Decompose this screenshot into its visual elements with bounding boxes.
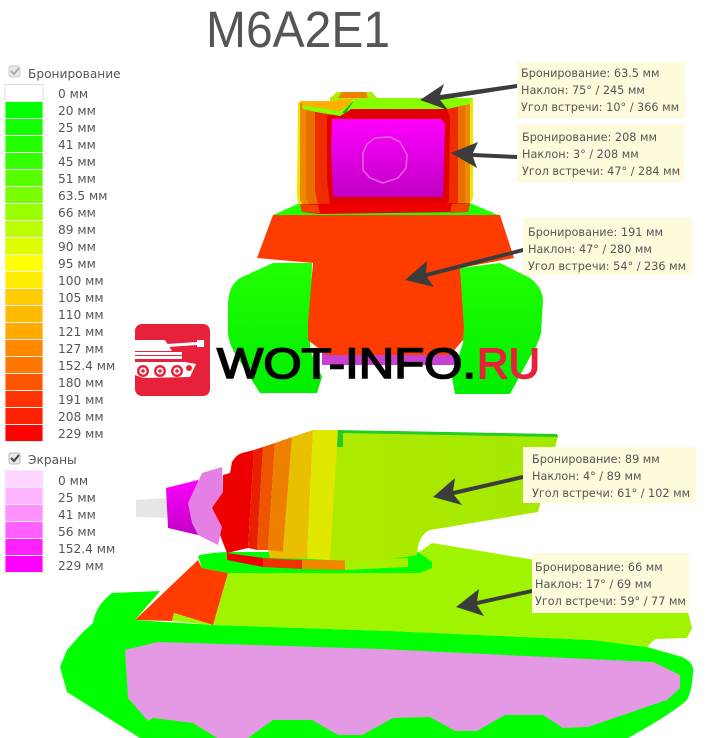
legend labels: armour: 51 мм	[58, 172, 96, 186]
callout: hull front: Угол встречи: 54° / 236 мм	[528, 260, 686, 273]
legend labels: armour: 191 мм	[58, 393, 104, 407]
callout: turret roof	[517, 62, 685, 118]
legend labels: armour: 127 мм	[58, 342, 104, 356]
arrow: turret roof	[420, 84, 517, 110]
watermark logo	[135, 324, 540, 396]
legend labels: armour: 180 мм	[58, 376, 104, 390]
callout: turret roof: Угол встречи: 10° / 366 мм	[521, 101, 679, 114]
legend labels: screens	[58, 474, 115, 573]
front view of tank	[228, 92, 543, 394]
legend heading: screens: Экраны	[28, 453, 77, 467]
callout: turret side: Угол встречи: 61° / 102 мм	[532, 487, 690, 500]
legend swatches: armour	[5, 84, 43, 442]
callout: hull front: Бронирование: 191 мм	[528, 226, 663, 239]
turret band: dark red	[248, 447, 263, 550]
turret body	[212, 430, 558, 560]
turret band: orange	[268, 437, 292, 552]
callout: hull front: Наклон: 47° / 280 мм	[528, 243, 652, 256]
turret top rim	[337, 430, 558, 447]
gun mantlet screen	[331, 119, 445, 197]
legend labels: screens: 41 мм	[58, 508, 96, 522]
turret collar	[300, 203, 470, 214]
legend heading: armour: Бронирование	[28, 67, 121, 81]
legend labels: armour: 105 мм	[58, 291, 104, 305]
track side panel	[125, 642, 680, 738]
checkbox: armour	[9, 66, 20, 77]
legend labels: armour: 100 мм	[58, 274, 104, 288]
legend labels: armour: 63.5 мм	[58, 189, 107, 203]
arrow: turret side	[433, 475, 523, 505]
callout: hull front	[523, 218, 692, 275]
legend labels: armour: 152.4 мм	[58, 359, 115, 373]
tracks: front right	[452, 263, 543, 394]
legend labels: armour: 95 мм	[58, 257, 96, 271]
legend labels: screens: 152.4 мм	[58, 542, 115, 556]
callout: turret roof: Бронирование: 63.5 мм	[521, 67, 660, 80]
legend labels: armour: 45 мм	[58, 155, 96, 169]
tracks: front left	[228, 263, 322, 393]
legend swatches: screens	[5, 470, 43, 572]
turret mantlet red	[212, 450, 254, 553]
turret ring	[198, 552, 432, 573]
callout: hull side: Бронирование: 66 мм	[535, 561, 663, 574]
lower hull strip	[322, 352, 455, 365]
arrow: hull side	[456, 589, 532, 616]
callout: turret side	[523, 447, 696, 503]
callout: hull side: Угол встречи: 59° / 77 мм	[535, 595, 686, 608]
callout: turret front: Угол встречи: 47° / 284 мм	[522, 165, 680, 178]
hull front armour	[257, 215, 514, 355]
turret ring segments	[227, 553, 408, 570]
callout: turret side: Бронирование: 89 мм	[532, 453, 660, 466]
legend labels: armour: 90 мм	[58, 240, 96, 254]
legend labels: screens: 56 мм	[58, 525, 96, 539]
arrow: hull front	[405, 248, 523, 287]
legend labels: armour: 121 мм	[58, 325, 104, 339]
logo icon: tank	[135, 324, 210, 396]
hull front plate	[135, 560, 228, 625]
callout: turret front: Наклон: 3° / 208 мм	[522, 148, 639, 161]
legend labels: armour: 0 мм	[58, 87, 88, 101]
left hatch	[300, 98, 355, 111]
arrow: turret front	[451, 142, 517, 168]
legend labels: armour: 208 мм	[58, 410, 104, 424]
callout: hull side	[532, 553, 689, 613]
legend labels: armour: 89 мм	[58, 223, 96, 237]
hull front lime wedge	[172, 613, 213, 625]
legend labels: armour: 20 мм	[58, 104, 96, 118]
callout: turret roof: Наклон: 75° / 245 мм	[521, 84, 645, 97]
legend labels: armour: 229 мм	[58, 427, 104, 441]
turret band: yellow	[307, 430, 338, 560]
cupola	[330, 92, 377, 101]
gun opening	[363, 137, 407, 183]
turret band: orange red	[257, 443, 275, 550]
legend labels: screens: 229 мм	[58, 559, 104, 573]
legend labels: armour: 25 мм	[58, 121, 96, 135]
hull top green	[273, 203, 498, 215]
logo text: domain: RU	[477, 340, 540, 388]
gun screen	[188, 467, 223, 545]
legend labels: armour: 110 мм	[58, 308, 104, 322]
side view of tank	[60, 430, 693, 738]
turret band: amber	[268, 430, 313, 559]
legend labels: armour	[58, 87, 115, 441]
callout: hull side: Наклон: 17° / 69 мм	[535, 578, 652, 591]
legend labels: screens: 0 мм	[58, 474, 88, 488]
legend labels: screens: 25 мм	[58, 491, 96, 505]
turret roof	[347, 98, 472, 109]
callout: turret front: Бронирование: 208 мм	[522, 131, 657, 144]
checkbox: screens	[9, 453, 20, 464]
gun barrel	[136, 498, 167, 518]
muzzle brake	[166, 480, 198, 535]
upper hull plate	[213, 543, 692, 647]
tracks: side	[60, 591, 693, 738]
legend: armour	[5, 66, 121, 442]
legend labels: armour: 66 мм	[58, 206, 96, 220]
turret red face	[327, 109, 450, 206]
turret lime rear	[320, 430, 558, 560]
turret outer bands	[297, 98, 473, 206]
turret front	[297, 92, 473, 214]
title: M6A2E1	[206, 1, 390, 58]
legend labels: armour: 41 мм	[58, 138, 96, 152]
logo text: WOT-INFO.	[217, 340, 476, 388]
legend: screens	[5, 453, 115, 573]
callout: turret side: Наклон: 4° / 89 мм	[532, 470, 642, 483]
callout: turret front	[517, 124, 684, 182]
